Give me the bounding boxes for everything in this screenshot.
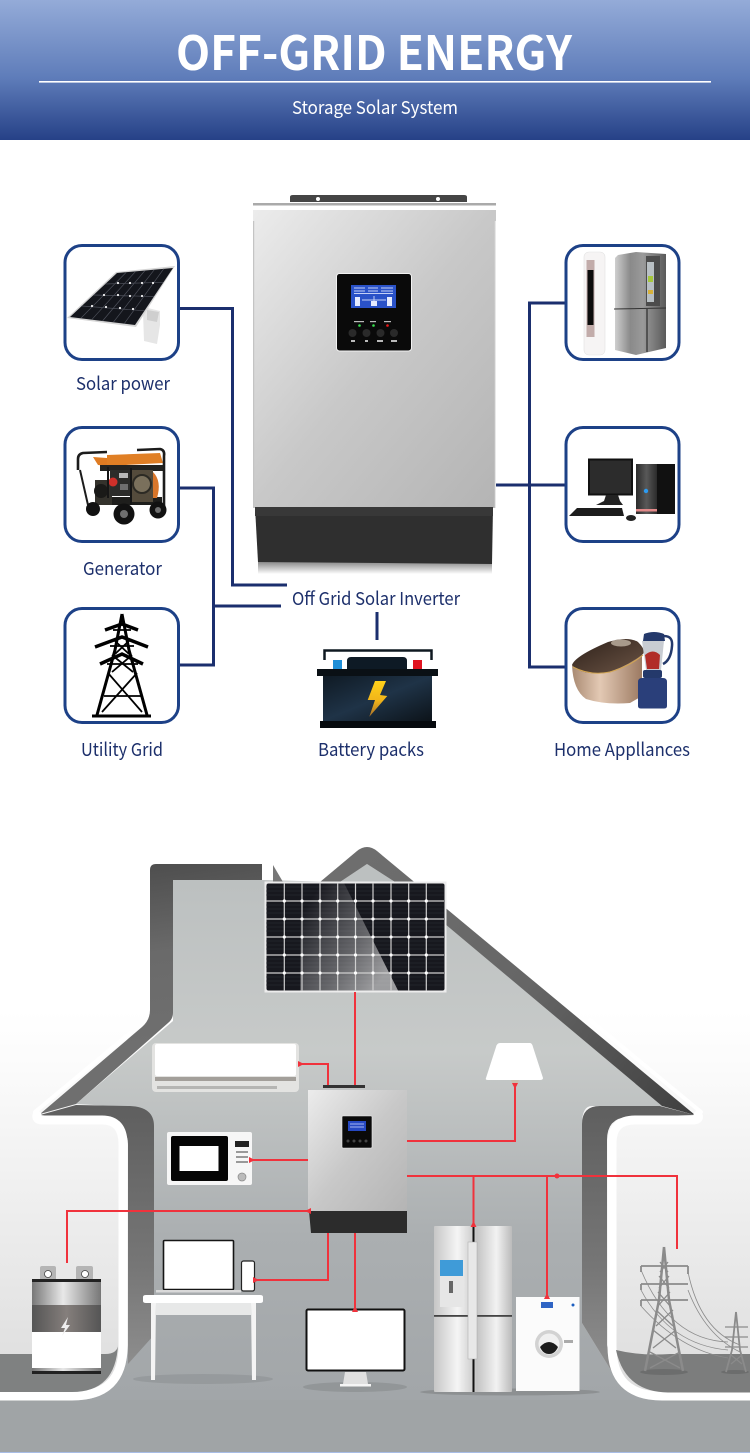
label: battery packs: Battery packs bbox=[318, 736, 424, 762]
card: generator bbox=[65, 428, 178, 542]
icon: battery pack bbox=[317, 650, 438, 728]
icon: large transmission tower bbox=[640, 1247, 740, 1375]
icon: solar panel on stand bbox=[67, 266, 175, 344]
ground left of house bbox=[0, 1344, 118, 1392]
label: utility grid: Utility Grid bbox=[81, 736, 163, 762]
icon: generator bbox=[78, 449, 166, 524]
connector lines: top diagram bbox=[179, 303, 565, 667]
wiring: red power lines bbox=[67, 992, 677, 1309]
icon: lamp bbox=[486, 1043, 543, 1086]
icon: small inverter bbox=[308, 1085, 407, 1233]
label: generator: Generator bbox=[83, 555, 163, 581]
icon: rice cooker and blender bbox=[572, 632, 672, 708]
title: OFF-GRID ENERGY bbox=[176, 15, 573, 84]
icon: laptop and phone on table bbox=[133, 1240, 273, 1384]
header banner bbox=[0, 0, 750, 140]
roof and wall shading bbox=[40, 847, 695, 1372]
card: computer bbox=[566, 428, 679, 542]
label: home appliances: Home Appllances bbox=[554, 736, 690, 762]
icon: microwave bbox=[167, 1132, 252, 1185]
icon: refrigerator bbox=[434, 1226, 512, 1392]
card: cooling appliances bbox=[566, 246, 679, 360]
icon: cylinder battery bbox=[32, 1266, 101, 1374]
card: utility grid bbox=[65, 608, 178, 722]
icon: air conditioner bbox=[152, 1043, 299, 1092]
label: solar power: Solar power bbox=[76, 370, 171, 396]
icon: desktop monitor bbox=[303, 1310, 407, 1392]
subtitle: Storage Solar System bbox=[292, 94, 458, 120]
white house outline bbox=[0, 1020, 750, 1396]
inverter control panel bbox=[336, 274, 412, 351]
icon: air conditioner tower and fridge bbox=[584, 252, 666, 355]
icon: roof solar panel bbox=[264, 882, 446, 992]
ground right of house bbox=[616, 1350, 750, 1392]
shadow under fridge and washer bbox=[420, 1388, 600, 1396]
icon: desktop computer bbox=[569, 458, 675, 521]
main inverter product bbox=[253, 195, 496, 574]
icon: washing machine bbox=[516, 1297, 580, 1391]
wiring junction dot bbox=[554, 1174, 560, 1178]
panel: house system diagram bbox=[0, 847, 750, 1453]
card: solar power bbox=[65, 246, 178, 360]
icon: small transmission tower bbox=[721, 1312, 749, 1374]
card: home appliances bbox=[566, 608, 679, 722]
label: off grid solar inverter: Off Grid Solar Inverter bbox=[292, 585, 461, 611]
outdoor background bbox=[0, 1010, 750, 1400]
icon: transmission tower bbox=[92, 614, 151, 716]
house interior and floor bbox=[0, 864, 750, 1453]
